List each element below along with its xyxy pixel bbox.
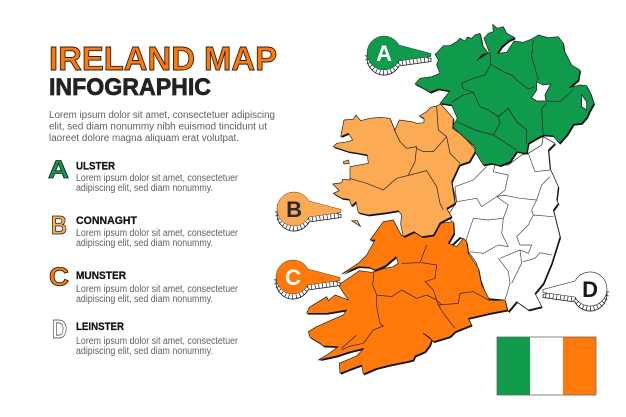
Lough Neagh <box>532 82 551 101</box>
legend: Leinster: LEINSTER <box>76 321 124 333</box>
legend letter A: A <box>48 156 69 184</box>
region: Connacht <box>333 104 477 238</box>
marker A: A <box>376 41 392 66</box>
intro text: Lorem ipsum dolor sit amet, consectetuer adipiscing <box>49 110 275 121</box>
region: Leinster <box>447 137 561 313</box>
legend: Connaught: Lorem ipsum dolor sit amet, consectetuer <box>76 228 239 239</box>
legend: Leinster: Lorem ipsum dolor sit amet, consectetuer <box>76 336 239 347</box>
intro text: laoreet dolore magna aliquam erat volutpat. <box>49 133 239 144</box>
legend letter C: C <box>49 262 69 292</box>
flag of Ireland <box>497 337 596 395</box>
legend: Munster: adipiscing elit, sed diam nonummy. <box>76 294 213 305</box>
marker A <box>367 36 431 75</box>
legend: Connaught <box>51 210 239 249</box>
Strangford Lough <box>582 95 587 110</box>
islands <box>343 160 361 227</box>
legend: Connaught: CONNAGHT <box>76 215 137 227</box>
marker C: C <box>285 265 301 290</box>
title <box>49 40 277 101</box>
legend letter D: D <box>52 314 67 344</box>
legend: Ulster: Lorem ipsum dolor sit amet, consectetuer <box>76 173 239 184</box>
legend: Leinster: adipiscing elit, sed diam nonummy. <box>76 346 213 357</box>
title: IRELAND MAP <box>49 40 277 77</box>
intro text <box>49 110 275 144</box>
legend: Munster <box>49 262 239 305</box>
legend: Ulster: adipiscing elit, sed diam nonummy. <box>76 183 213 194</box>
legend: Connaught: adipiscing elit, sed diam nonummy. <box>76 238 213 249</box>
legend: Ulster <box>48 156 239 194</box>
legend: Ulster: ULSTER <box>76 160 115 172</box>
region: Ulster <box>415 24 595 167</box>
marker D <box>543 272 607 311</box>
legend: Leinster <box>52 314 239 357</box>
legend: Munster: Lorem ipsum dolor sit amet, consectetuer <box>76 284 239 295</box>
title: INFOGRAPHIC <box>49 74 211 101</box>
marker B: B <box>286 197 302 222</box>
legend letter B: B <box>51 210 67 240</box>
region: Munster <box>307 220 508 375</box>
intro text: elit, sed diam nonummy nibh euismod tincidunt ut <box>49 122 267 132</box>
marker D: D <box>582 277 598 302</box>
marker B <box>277 192 341 231</box>
marker C <box>276 260 340 299</box>
legend: Munster: MUNSTER <box>76 270 126 282</box>
map of Ireland <box>307 24 595 375</box>
